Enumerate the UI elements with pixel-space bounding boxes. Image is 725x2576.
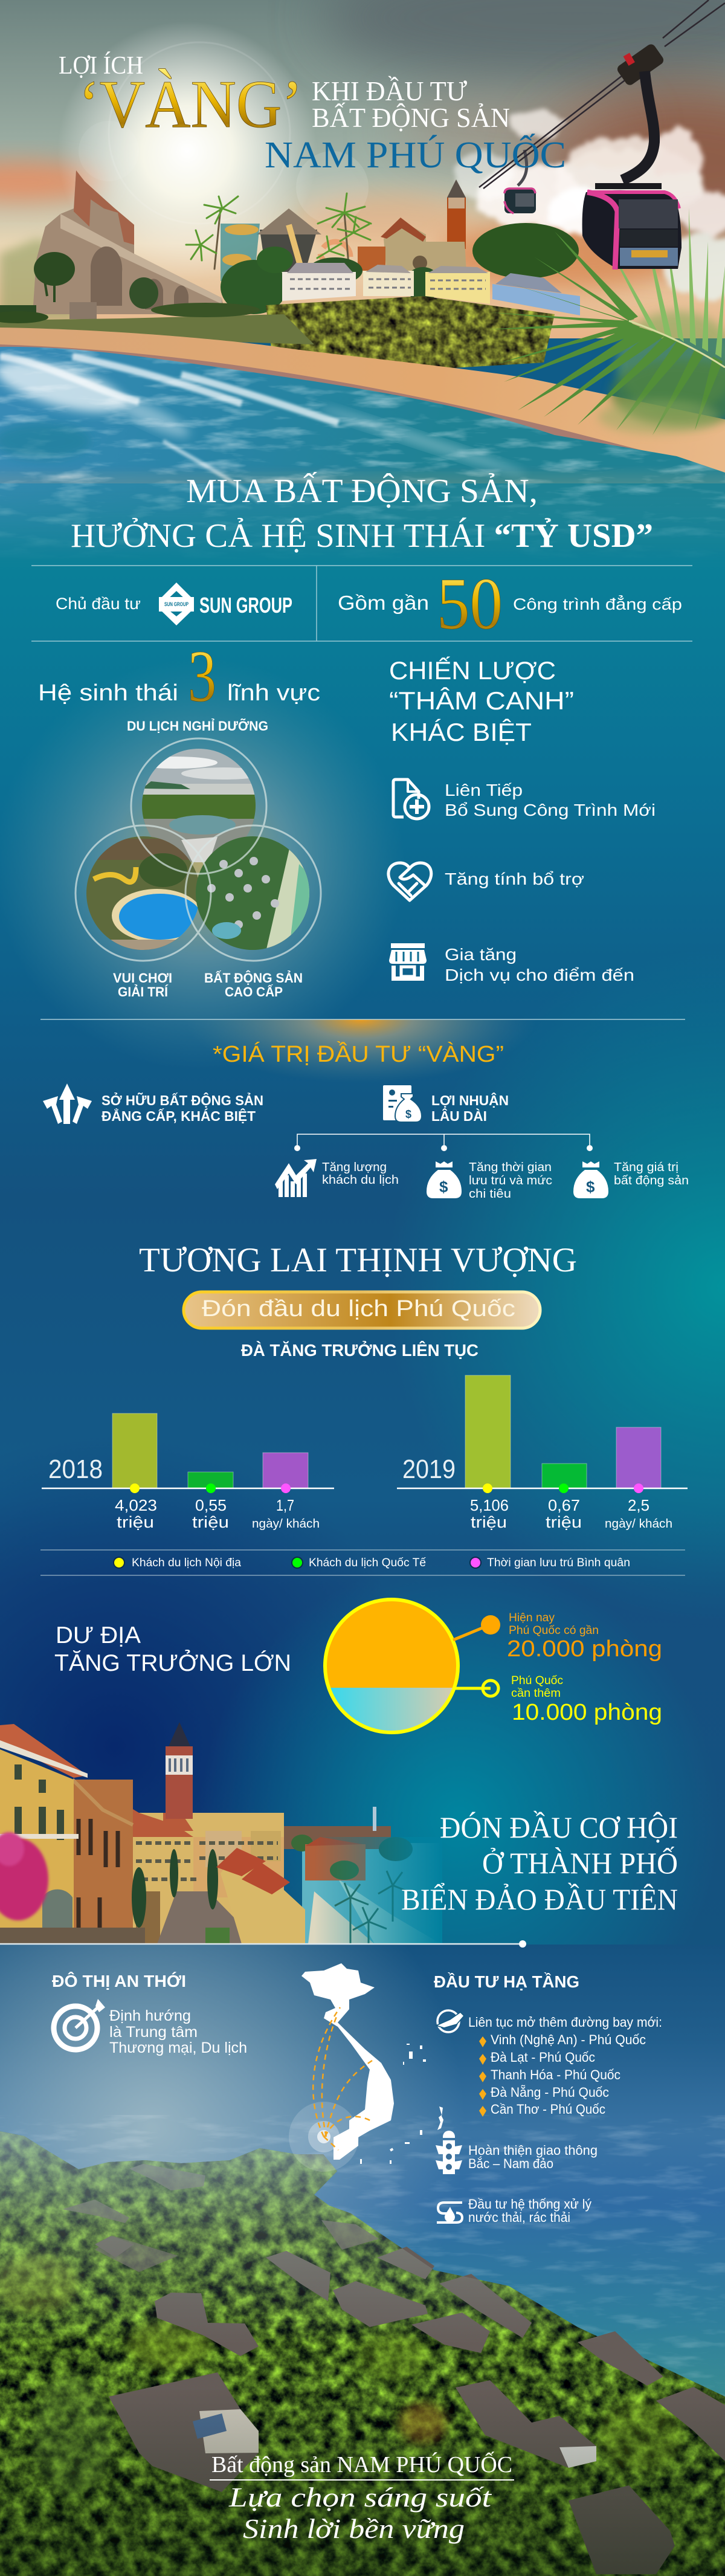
- callout: 20.000 phong: 20.000 phòng: [507, 1636, 662, 1662]
- logo: Sun Group: SUN GROUP: [199, 593, 292, 618]
- heading: du dia tang truong lon: [54, 1622, 291, 1676]
- callout: 10.000 phong: 10.000 phòng: [512, 1700, 662, 1725]
- info band: developer and number of projects: [31, 563, 692, 645]
- closing slogan: [210, 2451, 514, 2544]
- bottom aerial photograph: [0, 1945, 725, 2576]
- main street buildings: [72, 1780, 284, 1944]
- callout: 10.000 phong: cần thêm: [511, 1687, 561, 1700]
- label: bat dong san cao cap: [204, 970, 303, 999]
- villas among trees: [62, 2164, 725, 2574]
- values 2019: 5,106: [470, 1496, 509, 1514]
- benefit: tang gia tri bat dong san: bất động sản: [614, 1174, 689, 1187]
- legend: [40, 1550, 685, 1575]
- benefit: tang thoi gian luu tru: [427, 1161, 552, 1201]
- icon: growth chart: [275, 1159, 317, 1197]
- icon: document with money bag: [383, 1085, 422, 1122]
- panel: dau tu ha tang: Đầu tư hệ thống xử lý: [468, 2197, 591, 2212]
- label: vui choi giai tri: GIẢI TRÍ: [118, 984, 169, 999]
- number 50: 50: [437, 563, 503, 645]
- islands: [360, 2044, 443, 2164]
- icon: water treatment: [437, 2203, 462, 2223]
- icon: money bag: $: [586, 1178, 595, 1196]
- panel: dau tu ha tang: ĐẦU TƯ HẠ TẦNG: [434, 1972, 579, 1991]
- benefit: tang luong khach: Tăng lượng: [322, 1161, 387, 1174]
- value: loi nhuan lau dai: LỢI NHUẬN: [431, 1092, 509, 1108]
- info band: developer and number of projects: Công trình đẳng cấp: [513, 594, 682, 613]
- text: tang tinh bo tro: Tăng tính bổ trợ: [445, 870, 584, 888]
- title: hero heading: KHI ĐẦU TƯ: [312, 75, 467, 106]
- values 2018: ngày/ khách: [252, 1517, 320, 1531]
- sky: [0, 0, 725, 338]
- title: hero heading: LỢI ÍCH: [59, 51, 143, 80]
- heading: he sinh thai 3 linh vuc: lĩnh vực: [227, 680, 320, 706]
- panel: dau tu ha tang: [434, 1972, 662, 2225]
- list of new routes: [479, 2032, 646, 2117]
- sea: [0, 1945, 725, 2576]
- text: gia tang dich vu: Dịch vụ cho điểm đến: [445, 966, 634, 984]
- values 2018: 4,023: [115, 1496, 157, 1514]
- benefit: tang luong khach: khách du lịch: [322, 1173, 399, 1187]
- benefit: tang gia tri bat dong san: [573, 1161, 689, 1198]
- icon: new document: [393, 780, 429, 819]
- benefit: tang thoi gian luu tru: chi tiêu: [469, 1187, 511, 1201]
- values 2019: [470, 1496, 672, 1531]
- heading: KHÁC BIỆT: [391, 718, 532, 746]
- text: gia tang dich vu: Gia tăng: [445, 945, 517, 964]
- Phu Quoc rings: [289, 2102, 359, 2172]
- shadow at bottom of forest: [0, 2387, 725, 2576]
- street and near houses: [132, 1848, 305, 1944]
- label: bat dong san cao cap: CAO CẤP: [225, 984, 283, 999]
- list of new routes: Đà Nẵng - Phú Quốc: [491, 2085, 609, 2100]
- list of new routes: Vinh (Nghệ An) - Phú Quốc: [491, 2032, 646, 2047]
- closing slogan: Sinh lời bền vững: [243, 2513, 465, 2544]
- info band: developer and number of projects: Gồm gần: [338, 592, 429, 614]
- values 2019: triệu: [471, 1513, 507, 1531]
- values 2019: triệu: [546, 1513, 582, 1531]
- heading: he sinh thai 3 linh vuc: [38, 636, 320, 717]
- heading: CHIẾN LƯỢC: [389, 656, 556, 685]
- bar chart 2018: [42, 1413, 334, 1531]
- title: hero heading: BẤT ĐỘNG SẢN: [312, 102, 510, 133]
- bar chart 2019: [397, 1375, 688, 1531]
- icon: storefront: [389, 943, 427, 981]
- benefit: tang gia tri bat dong san: Tăng giá trị: [614, 1161, 678, 1174]
- label: bat dong san cao cap: BẤT ĐỘNG SẢN: [204, 970, 303, 986]
- panel: dau tu ha tang: Hoàn thiện giao thông: [468, 2143, 598, 2158]
- list of new routes: Đà Lạt - Phú Quốc: [491, 2050, 595, 2065]
- label: vui choi giai tri: VUI CHƠI: [113, 970, 172, 986]
- callout: 10.000 phong: [456, 1674, 662, 1725]
- heading: du dia tang truong lon: DƯ ĐỊA: [56, 1622, 141, 1648]
- map: Vietnam with flight routes: [289, 1963, 443, 2172]
- photo: water park: [85, 834, 205, 958]
- benefit: tang thoi gian luu tru: Tăng thời gian: [469, 1161, 552, 1174]
- venn diagram of three sectors: [76, 718, 321, 999]
- gold word VÀNG: ‘VÀNG’: [79, 67, 303, 142]
- sea and beach: [302, 1843, 441, 1944]
- closing slogan: Lựa chọn sáng suốt: [228, 2482, 492, 2513]
- list of new routes: Cần Thơ - Phú Quốc: [491, 2102, 605, 2117]
- icon: money bag: [573, 1161, 608, 1198]
- callout: 20.000 phong: Hiện nay: [509, 1612, 555, 1624]
- label: vui choi giai tri: [113, 970, 172, 999]
- info band: developer and number of projects: Chủ đầu tư: [56, 595, 141, 613]
- forest: [0, 2131, 725, 2576]
- logo: Sun Group: SUN GROUP: [164, 601, 188, 607]
- icon: money bag: $: [439, 1178, 448, 1196]
- text: lien tiep: Bổ Sung Công Trình Mới: [445, 801, 656, 819]
- icon: handshake heart: [388, 863, 431, 900]
- divider with end dot: [0, 1940, 526, 1948]
- bar chart 2019: 2019: [402, 1454, 456, 1484]
- panel: do thi an thoi: là Trung tâm: [109, 2024, 198, 2041]
- callout: 20.000 phong: Phú Quốc có gần: [509, 1624, 599, 1637]
- icon: traffic light: [436, 2131, 462, 2174]
- value: so huu bat dong san: SỞ HỮU BẤT ĐỘNG SẢN: [102, 1091, 263, 1108]
- value: so huu bat dong san: ĐẲNG CẤP, KHÁC BIỆT: [102, 1108, 256, 1124]
- panel: dau tu ha tang: Liên tục mở thêm đường bay mới:: [468, 2015, 662, 2030]
- icon: plane and globe: [436, 2010, 464, 2032]
- heading: gia tri dau tu vang: *GIÁ TRỊ ĐẦU TƯ “VÀNG”: [213, 1041, 504, 1067]
- pill: don dau du lich phu quoc: Đón đầu du lịch Phú Quốc: [202, 1296, 515, 1322]
- icon: document with money bag: $: [405, 1108, 411, 1120]
- icon: money bag: [427, 1161, 462, 1198]
- values 2019: 2,5: [628, 1496, 649, 1514]
- beach: [0, 328, 725, 483]
- divider line: [40, 1019, 685, 1020]
- clouds: [453, 112, 725, 299]
- value: loi nhuan lau dai: LÂU DÀI: [431, 1108, 487, 1124]
- photo: resort: [133, 746, 266, 867]
- closing slogan: Bất động sản NAM PHÚ QUỐC: [211, 2451, 512, 2478]
- title: hero heading: NAM PHÚ QUỐC: [265, 134, 566, 176]
- callout: 20.000 phong: [453, 1612, 662, 1662]
- light haze over forest: [0, 2131, 725, 2576]
- heading: don dau co hoi: Ở THÀNH PHỐ: [482, 1846, 678, 1880]
- text: gia tang dich vu: [445, 945, 634, 984]
- ruins aqueduct: [0, 170, 225, 323]
- values 2018: triệu: [117, 1513, 154, 1531]
- small cable car: [504, 150, 536, 213]
- page background: [0, 453, 725, 1952]
- heading: “THÂM CANH”: [389, 686, 574, 715]
- subheading: da tang truong lien tuc: ĐÀ TĂNG TRƯỞNG LIÊN TỤC: [241, 1340, 478, 1360]
- panel: dau tu ha tang: nước thải, rác thải: [468, 2210, 570, 2225]
- list of new routes: Thanh Hóa - Phú Quốc: [491, 2067, 620, 2082]
- heading: don dau co hoi: BIỂN ĐẢO ĐẦU TIÊN: [401, 1882, 678, 1916]
- text: lien tiep: [445, 781, 656, 819]
- fade to teal: [314, 1837, 442, 1946]
- legend: Thời gian lưu trú Bình quân: [487, 1557, 630, 1569]
- pill: don dau du lich phu quoc: [184, 1292, 540, 1328]
- heading: he sinh thai 3 linh vuc: Hệ sinh thái: [38, 680, 178, 706]
- icon: three arrows: [43, 1083, 92, 1124]
- panel: do thi an thoi: [52, 1971, 247, 2056]
- values 2018: 1,7: [276, 1496, 294, 1514]
- dashed routes: [313, 2007, 373, 2150]
- heading: mua bat dong san: MUA BẤT ĐỘNG SẢN,: [186, 471, 538, 510]
- benefit: tang luong khach: [275, 1159, 399, 1197]
- bar chart 2018: 2018: [48, 1454, 103, 1484]
- legend: Khách du lịch Nội địa: [132, 1557, 241, 1569]
- legend: Khách du lịch Quốc Tế: [309, 1557, 426, 1569]
- values 2018: 0,55: [195, 1496, 227, 1514]
- connector tree: [294, 1134, 593, 1151]
- panel: do thi an thoi: Định hướng: [109, 2007, 191, 2024]
- hero illustration: sky, resort, beach, cable car: [0, 0, 725, 574]
- heading: [389, 656, 574, 746]
- villas: [282, 263, 580, 315]
- heading: don dau co hoi: [401, 1810, 678, 1916]
- water park and church tower: [221, 179, 466, 284]
- title: hero heading: [59, 51, 566, 176]
- trees and forest: [0, 223, 579, 370]
- sea with waves: [0, 347, 725, 574]
- photo: real estate: [193, 834, 314, 955]
- panel: do thi an thoi: Thương mại, Du lịch: [109, 2039, 247, 2056]
- panel: chien luoc tham canh: [388, 656, 656, 984]
- heading: he sinh thai 3 linh vuc: 3: [188, 636, 216, 717]
- value: loi nhuan lau dai: [383, 1085, 509, 1124]
- label: du lich nghi duong: DU LỊCH NGHỈ DƯỠNG: [127, 718, 268, 734]
- text: lien tiep: Liên Tiếp: [445, 781, 523, 799]
- logo: Sun Group: [159, 583, 292, 625]
- panel: do thi an thoi: ĐÔ THỊ AN THỚI: [52, 1971, 186, 1990]
- heading: don dau co hoi: ĐÓN ĐẦU CƠ HỘI: [440, 1810, 678, 1844]
- country shape: [301, 1963, 394, 2160]
- palm trees: [186, 193, 371, 272]
- values 2019: ngày/ khách: [605, 1517, 672, 1531]
- icon: target with arrow: [54, 1999, 105, 2050]
- palm leaf: [488, 208, 725, 435]
- left large building: [0, 1724, 145, 1944]
- values 2019: 0,67: [548, 1496, 580, 1514]
- bars 2019: [465, 1375, 661, 1488]
- heading: du dia tang truong lon: TĂNG TRƯỞNG LỚN: [54, 1650, 291, 1676]
- chart: hotel rooms circle: [325, 1600, 662, 1732]
- benefit: tang thoi gian luu tru: lưu trú và mức: [469, 1174, 552, 1187]
- heading: mua bat dong san: [71, 471, 653, 555]
- heading: tuong lai thinh vuong: TƯƠNG LAI THỊNH VƯỢNG: [139, 1241, 577, 1279]
- callout: 10.000 phong: Phú Quốc: [511, 1674, 563, 1687]
- value: so huu bat dong san: [43, 1083, 263, 1124]
- illustration: coastal town: [0, 1722, 442, 1946]
- bell tower: [166, 1722, 193, 1819]
- heading: mua bat dong san: HƯỞNG CẢ HỆ SINH THÁI “TỶ USD”: [71, 517, 653, 555]
- bars 2018: [112, 1413, 308, 1488]
- far buildings: [193, 1807, 413, 1880]
- panel: dau tu ha tang: Bắc – Nam đảo: [468, 2156, 553, 2171]
- cable car with cables: [479, 0, 725, 270]
- values 2018: triệu: [192, 1513, 229, 1531]
- values 2018: [115, 1496, 320, 1531]
